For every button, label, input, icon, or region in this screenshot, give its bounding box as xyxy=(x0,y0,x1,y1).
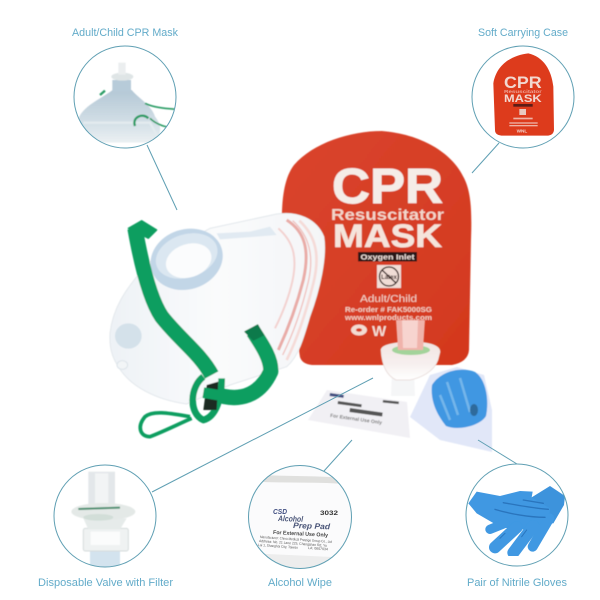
ring: alcohol wipe xyxy=(248,466,352,568)
no latex symbol: Latex xyxy=(381,275,397,281)
mask port ring xyxy=(143,219,231,299)
panel: adult child CPR mask xyxy=(72,27,178,148)
accessories on table xyxy=(308,320,492,452)
case wordmark MASK: MASK xyxy=(333,218,442,254)
leader line: case xyxy=(472,143,499,173)
leader line: valve xyxy=(152,378,373,492)
thumbnail: alcohol wipe: Address: No. 21 Lane 225, Changshan Rd, Yu xyxy=(259,539,327,548)
thumbnail: alcohol wipe: Prep Pad xyxy=(293,521,331,531)
thumbnail: alcohol wipe xyxy=(258,475,338,568)
thumbnail: alcohol wipe: LA: 0607034 xyxy=(308,546,328,551)
thumbnail: alcohol wipe: CSD xyxy=(273,509,287,516)
oxygen inlet badge: Oxygen Inlet xyxy=(360,252,415,262)
red carrying case xyxy=(282,131,471,365)
panel: alcohol wipe xyxy=(245,462,355,589)
alcohol prep pad: For External Use Only xyxy=(330,413,383,426)
panel: disposable valve with filter xyxy=(38,465,173,589)
case wordmark Resuscitator: Resuscitator xyxy=(331,207,444,224)
thumbnail: alcohol wipe: 3032 xyxy=(320,511,339,517)
leader line: mask xyxy=(147,145,177,210)
label: adult child CPR mask: Adult/Child CPR Mask xyxy=(72,27,178,39)
WNL logo: W xyxy=(372,323,387,340)
mask inner tube xyxy=(217,227,277,239)
ring: disposable valve xyxy=(54,465,156,567)
panel: nitrile gloves xyxy=(466,464,568,589)
green head strap xyxy=(128,221,271,437)
mask rim with red reflection xyxy=(275,220,317,360)
thumbnail: carrying case: CPR xyxy=(504,73,542,92)
ring: adult child CPR mask xyxy=(74,46,176,148)
label: soft carrying case: Soft Carrying Case xyxy=(478,27,568,39)
thumbnail: alcohol wipe: For External Use Only xyxy=(273,530,329,539)
thumbnail: alcohol wipe: Alcohol xyxy=(277,514,304,524)
thumbnail: gloves xyxy=(468,486,565,553)
website text: www.wnlproducts.com xyxy=(344,313,432,322)
thumbnail: carrying case: MASK xyxy=(504,93,542,105)
disposable valve xyxy=(381,320,440,396)
ring: soft carrying case xyxy=(472,46,574,148)
alcohol prep pad xyxy=(308,390,410,438)
thumbnail: carrying case: Resuscitator xyxy=(504,89,542,95)
case wordmark CPR: CPR xyxy=(332,160,443,214)
thumbnail: CPR mask xyxy=(78,63,176,143)
thumbnail: alcohol wipe: Manufacturer: China Medical Prestige Group Co., Ltd xyxy=(260,535,332,544)
label: nitrile gloves: Pair of Nitrile Gloves xyxy=(467,577,567,589)
mask side valve xyxy=(115,323,142,369)
thumbnail: carrying case xyxy=(493,53,554,136)
case body xyxy=(282,131,471,365)
leader line: wipe xyxy=(324,440,352,471)
label: alcohol wipe: Alcohol Wipe xyxy=(268,577,332,589)
label: disposable valve with filter: Disposable Valve with Filter xyxy=(38,577,173,589)
reorder text: Re-order # FAK5000SG xyxy=(345,305,432,314)
no latex symbol xyxy=(377,265,401,288)
WNL logo xyxy=(351,323,387,340)
thumbnail: valve xyxy=(71,472,135,568)
glove bag xyxy=(410,367,492,452)
clear oxygen mask xyxy=(110,213,325,437)
thumbnail: alcohol wipe: Lai 1, Shanghai City, Taiwan xyxy=(258,543,298,550)
leader line: gloves xyxy=(478,440,517,464)
panel: soft carrying case xyxy=(472,27,574,148)
mask shell xyxy=(110,213,325,404)
ring: nitrile gloves xyxy=(466,464,568,566)
adult child label: Adult/Child xyxy=(360,293,417,305)
thumbnail: carrying case: WNL xyxy=(517,129,527,134)
